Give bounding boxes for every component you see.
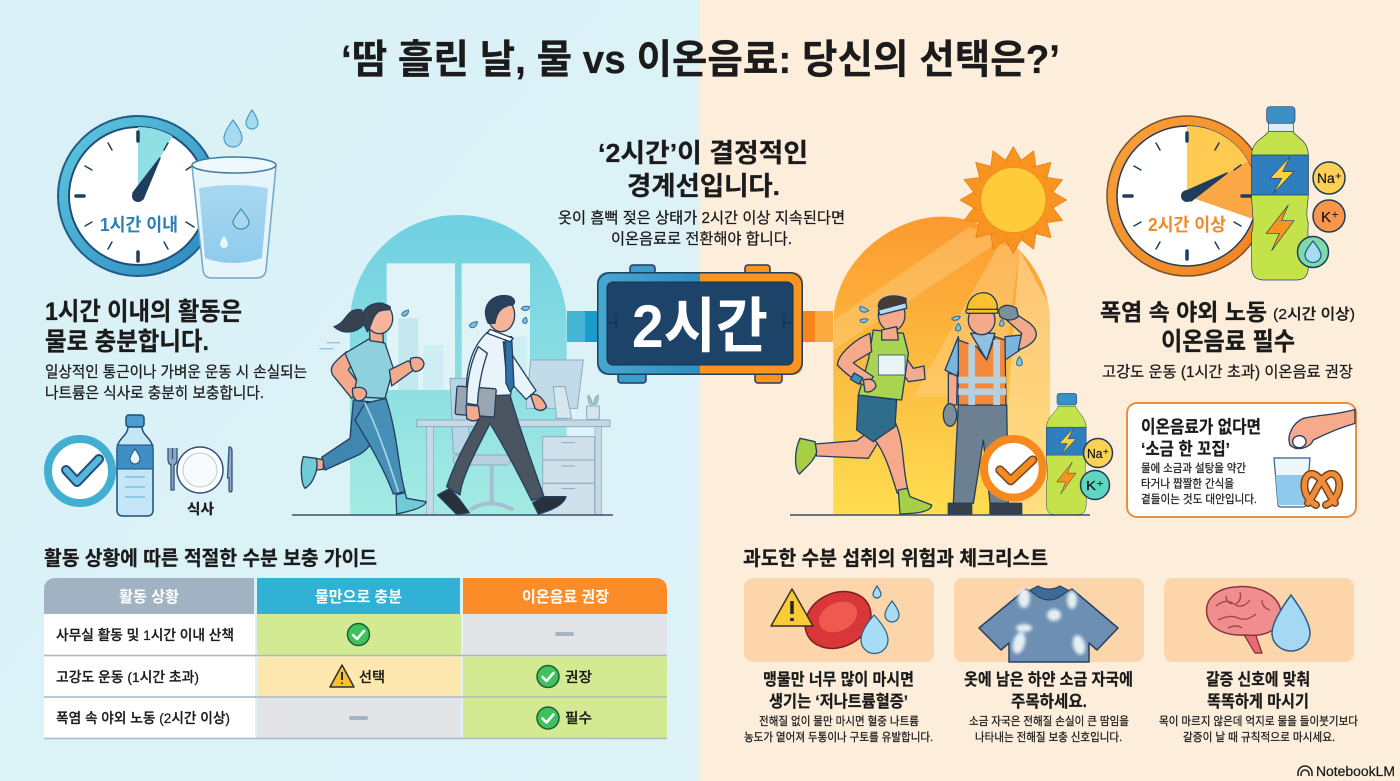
center: decisive boundary heading (598, 138, 808, 201)
figure: jogging woman (301, 303, 426, 514)
card heading (763, 670, 914, 711)
icon: sweat drops right scene (860, 307, 1022, 366)
background: right electrolyte side (700, 0, 1400, 781)
badge: small Na+ (1084, 438, 1112, 468)
icon: red blood cell with warning (771, 581, 899, 659)
timer device: 2 hours (597, 265, 803, 383)
card heading (1206, 670, 1310, 711)
heading: hydration guide: 활동 상황에 따른 적절한 수분 보충 가이드 (44, 547, 377, 570)
card heading: 옷에 남은 하얀 소금 자국에 (964, 670, 1133, 689)
figure: commuting office worker (438, 296, 566, 514)
callout: pinch of salt: 물에 소금과 설탕을 약간 (1141, 461, 1246, 475)
icon: clock over two hours (1107, 116, 1267, 276)
logo: NotebookLM: NotebookLM (1316, 764, 1395, 779)
card text: 나타내는 전해질 보충 신호입니다. (975, 731, 1122, 744)
icon: large sports drink (1252, 107, 1309, 280)
backdrop arch with sunbeams (833, 217, 1050, 515)
card text: 농도가 옅어져 두통이나 구토를 유발합니다. (744, 731, 933, 744)
heading: electrolyte required: (2시간 이상) (1273, 306, 1355, 323)
table header: 활동 상황 (119, 588, 179, 606)
heading: water sufficient: 물로 충분합니다. (45, 328, 209, 356)
icon: t-shirt with salt stains (979, 586, 1118, 662)
text: water explanation (45, 363, 307, 402)
center: decisive boundary heading: ‘2시간’이 결정적인 (598, 138, 808, 168)
icon: falling drops (224, 110, 258, 147)
card text: 갈증이 날 때 규칙적으로 마시세요. (1183, 730, 1335, 744)
table row: high intensity: 고강도 운동 (1시간 초과) (56, 669, 199, 685)
callout: pinch of salt: ‘소금 한 꼬집’ (1141, 439, 1230, 459)
icon: brain and water drop (1207, 587, 1310, 653)
connector: timer to right arch (803, 311, 833, 342)
icon: water bottle (117, 415, 153, 516)
icon: hand sprinkling salt (1289, 409, 1355, 449)
motion lines (319, 343, 340, 349)
table row: office (44, 614, 667, 655)
table row: high intensity (44, 656, 667, 696)
card heading (964, 670, 1133, 711)
center: boundary explanation: 옷이 흠뻑 젖은 상태가 2시간 이상 지속된다면 (558, 209, 845, 227)
badge: small K+ (1080, 470, 1110, 500)
badge: K+: K⁺ (1321, 209, 1339, 226)
panel: water side top (45, 110, 307, 517)
table header: 물만으로 충분 (315, 588, 402, 606)
timer device: 2 hours: 2시간 (632, 293, 768, 360)
card: hyponatremia (744, 578, 934, 744)
callout: pinch of salt: 곁들이는 것도 대안입니다. (1141, 493, 1257, 506)
heading: electrolyte required: 이온음료 필수 (1161, 328, 1295, 356)
heading: overhydration risks: 과도한 수분 섭취의 위험과 체크리스트 (743, 547, 1048, 570)
icon: clock within one hour: 1시간 이내 (100, 215, 178, 235)
background: left water side (0, 0, 700, 781)
table row: high intensity: 선택 (359, 669, 385, 685)
icon: sweat drops left scene (402, 306, 529, 328)
label: meal: 식사 (187, 501, 214, 517)
table row: high intensity: 권장 (565, 669, 592, 685)
table row: office: 사무실 활동 및 1시간 이내 산책 (56, 627, 234, 643)
card heading: 주목하세요. (1011, 692, 1087, 711)
icon: pretzel (1304, 474, 1339, 505)
ground lines (292, 514, 1090, 516)
card text (1159, 715, 1358, 744)
table row: outdoor labor (44, 698, 667, 738)
card heading: 갈증 신호에 맞춰 (1206, 670, 1310, 689)
card text (969, 715, 1129, 744)
card text: 목이 마르지 않은데 억지로 물을 들이붓기보다 (1159, 715, 1358, 728)
icon: glass of water (192, 157, 276, 278)
figure: construction worker (943, 293, 1036, 514)
card: thirst signal (1159, 578, 1358, 744)
table header: 이온음료 권장 (522, 588, 609, 606)
card heading: 맹물만 너무 많이 마시면 (763, 670, 914, 689)
table: hydration guide (44, 578, 667, 738)
icon: meal plate and cutlery (168, 447, 232, 493)
center: boundary explanation (558, 209, 845, 248)
icon: water glass (1274, 458, 1310, 507)
card text: 소금 자국은 전해질 손실이 큰 땀임을 (969, 715, 1129, 728)
illustration: outdoor heat scene (796, 146, 1086, 515)
text: high intensity recommendation: 고강도 운동 (1시간 초과) 이온음료 권장 (1102, 363, 1353, 381)
badge: water drop (1298, 236, 1328, 268)
card heading: 생기는 ‘저나트륨혈증’ (769, 692, 908, 711)
icon: blue check (48, 439, 112, 503)
badge: Na+: Na⁺ (1317, 170, 1342, 186)
center: boundary explanation: 이온음료로 전환해야 합니다. (611, 230, 792, 248)
card text (744, 714, 933, 744)
callout: pinch of salt: 이온음료가 없다면 (1141, 417, 1261, 437)
connector: left arch to timer (567, 311, 597, 342)
text: water explanation: 나트륨은 식사로 충분히 보충합니다. (45, 384, 264, 402)
illustration: office and commuter scene (301, 215, 610, 515)
backdrop arch with windows (350, 215, 567, 515)
card text: 전해질 없이 물만 마시면 혈중 나트륨 (759, 714, 919, 728)
table row: outdoor labor: 필수 (565, 710, 592, 726)
card heading: 똑똑하게 마시기 (1207, 692, 1309, 711)
title: ‘땀 흘린 날, 물 vs 이온음료: 당신의 선택은?’ (341, 38, 1060, 82)
badge: K+ (1313, 200, 1345, 232)
heading: electrolyte required: 폭염 속 야외 노동 (1100, 299, 1267, 325)
icon: sun (960, 146, 1067, 254)
heading: water sufficient (45, 298, 242, 356)
figure: marathon runner (796, 296, 932, 514)
office desk, monitor and drawers (417, 360, 610, 515)
callout: pinch of salt: 타거나 짭짤한 간식을 (1141, 476, 1234, 490)
callout: pinch of salt (1127, 403, 1356, 517)
card: salt marks (954, 578, 1144, 744)
icon: orange check (984, 439, 1043, 498)
heading: electrolyte required (1100, 299, 1355, 356)
table row: outdoor labor: 폭염 속 야외 노동 (2시간 이상) (56, 710, 230, 726)
panel: electrolyte side top (1100, 107, 1356, 517)
icon: clock within one hour (58, 116, 218, 276)
badge: small K+: K⁺ (1086, 478, 1104, 493)
icon: small sports drink (1046, 393, 1086, 515)
center: decisive boundary heading: 경계선입니다. (627, 171, 780, 201)
text: water explanation: 일상적인 통근이나 가벼운 운동 시 손실되는 (45, 363, 307, 381)
icon: clock over two hours: 2시간 이상 (1148, 215, 1226, 235)
table header (44, 578, 667, 614)
badge: small Na+: Na⁺ (1087, 446, 1109, 461)
heading: water sufficient: 1시간 이내의 활동은 (45, 298, 242, 326)
badge: Na+ (1313, 162, 1345, 194)
